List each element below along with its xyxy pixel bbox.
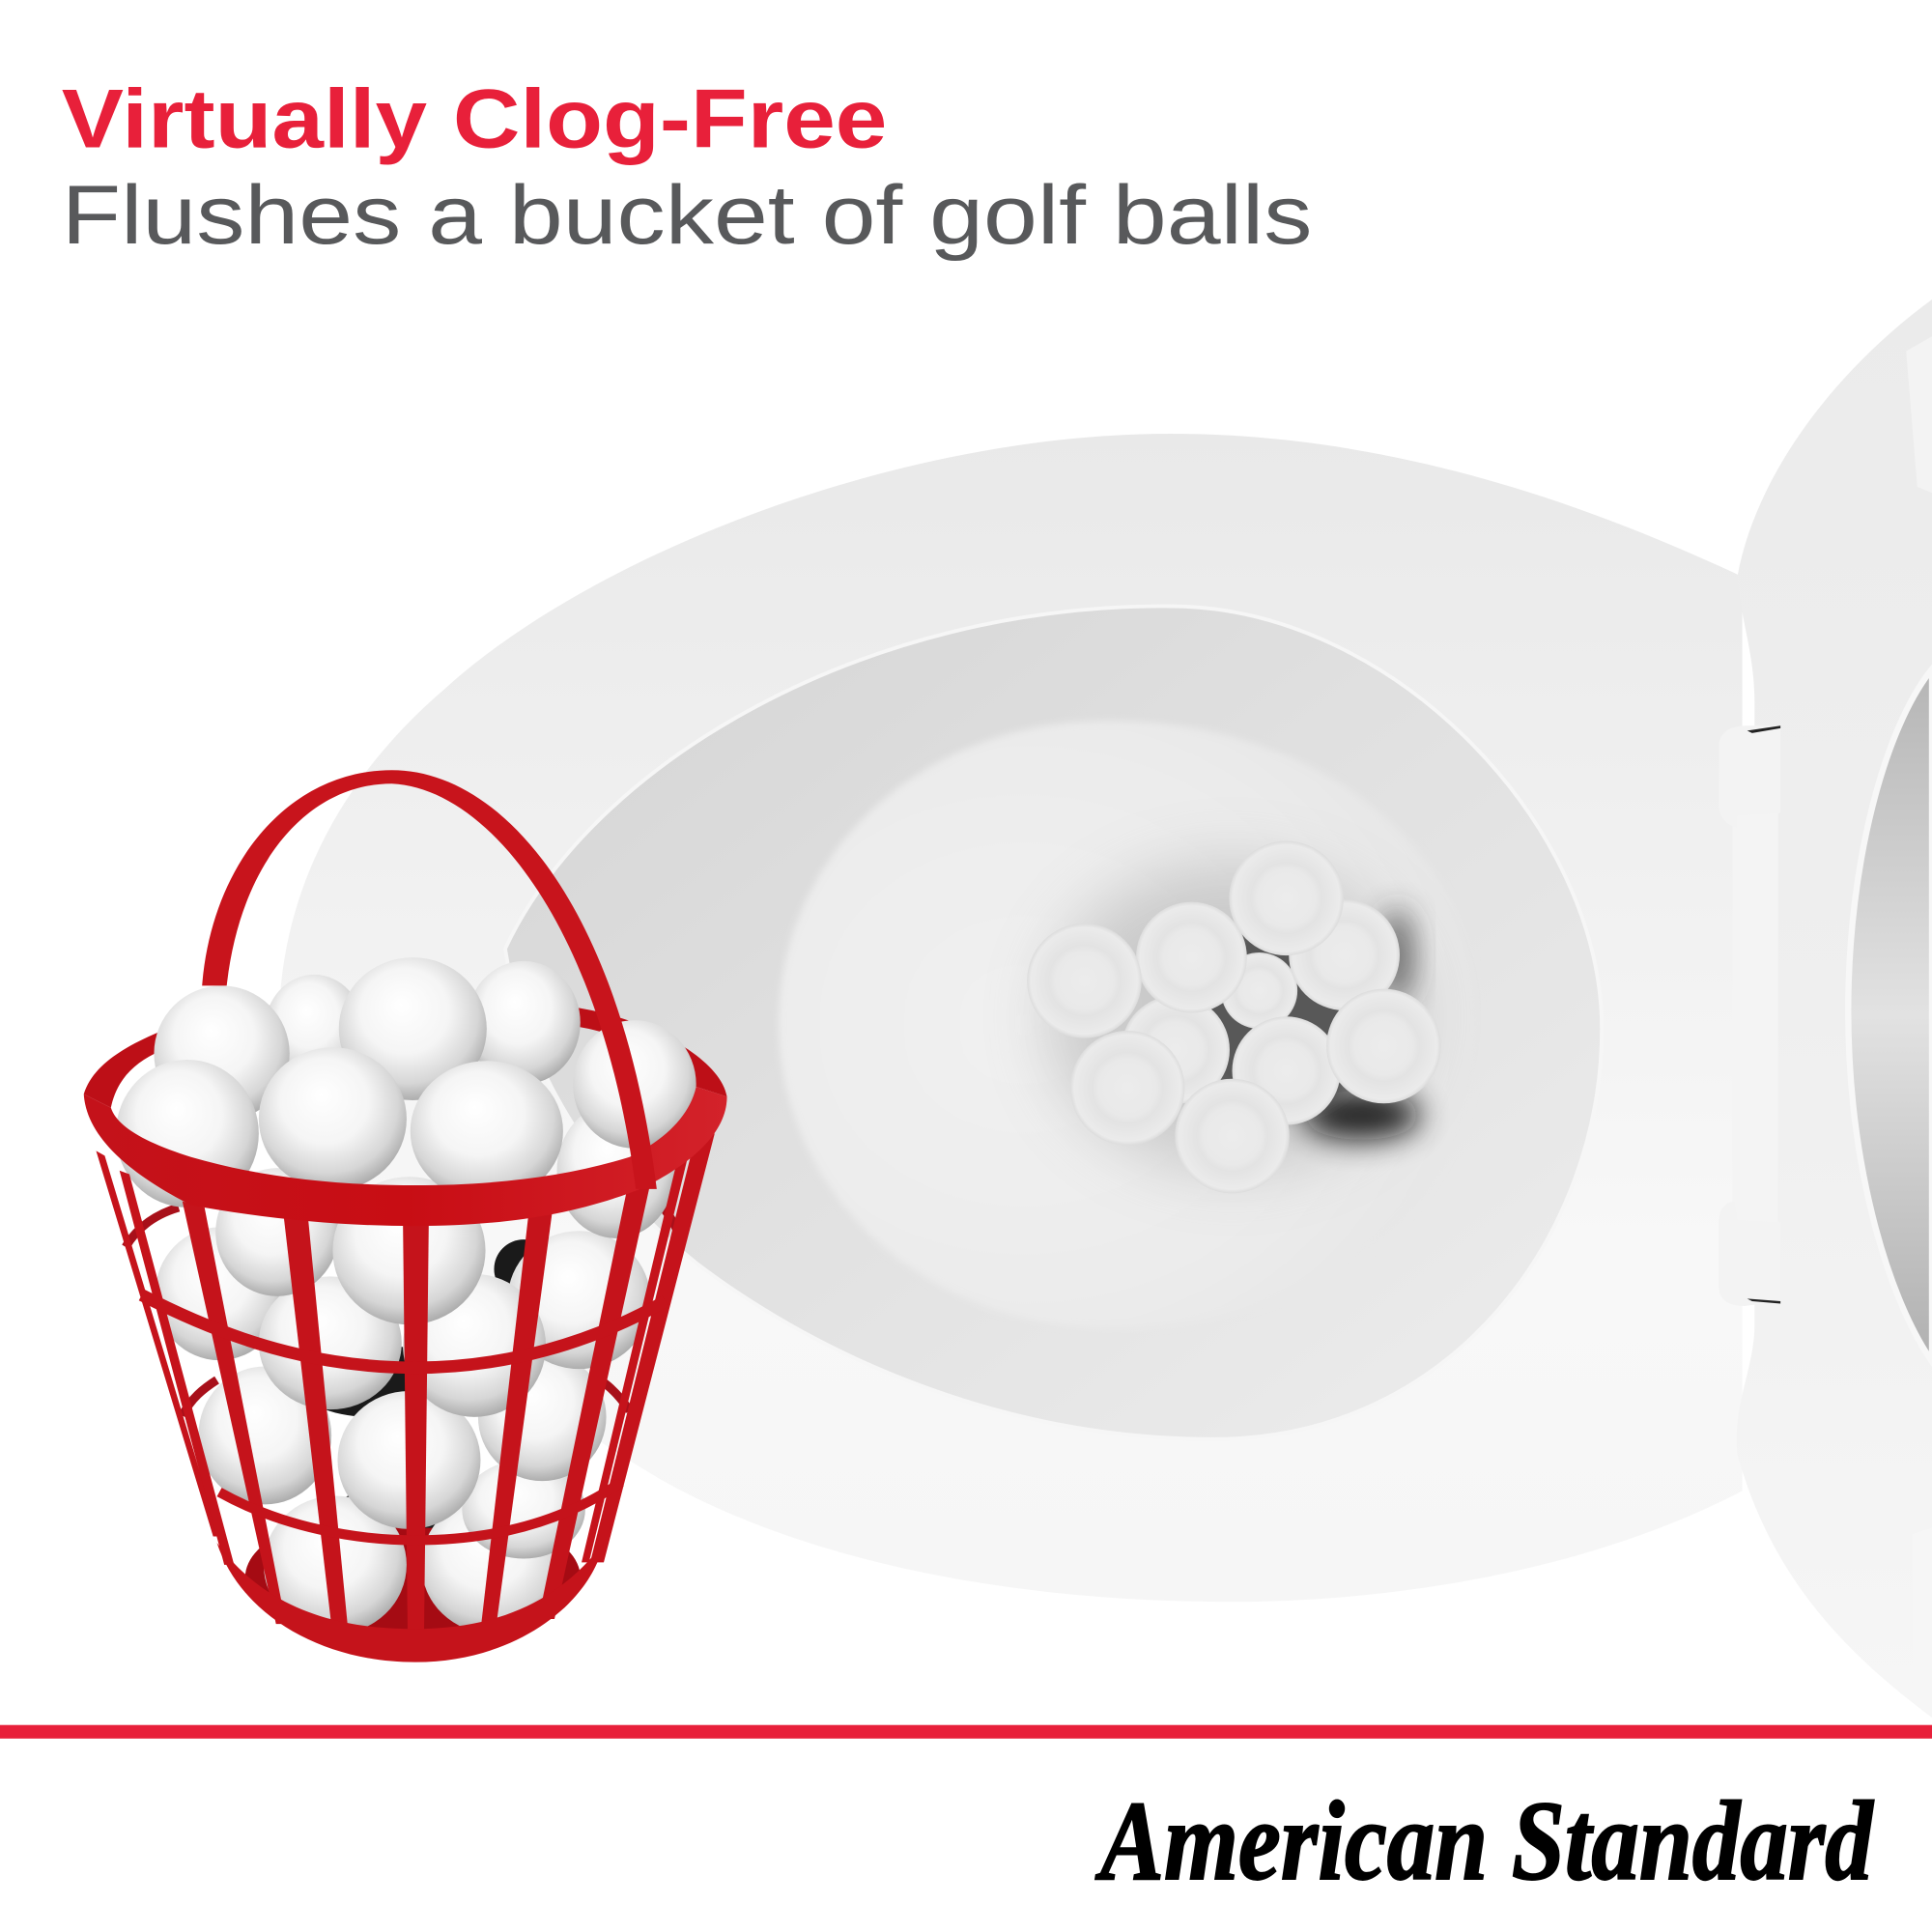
- top bumper: [1906, 336, 1932, 493]
- bottom bumper: [1913, 1528, 1932, 1694]
- toilet bowl: [281, 434, 1743, 1602]
- golf balls in basket: [116, 957, 696, 1634]
- basket hoops: [142, 1295, 666, 1540]
- basket handle: [202, 770, 657, 1189]
- seat body: [1737, 299, 1932, 1718]
- bowl interior: [505, 607, 1602, 1439]
- water surface: [779, 721, 1479, 1328]
- bowl rim: [281, 434, 1743, 1602]
- title: Virtually Clog-Free: [62, 71, 887, 165]
- basket inner rings: [126, 1199, 679, 1416]
- lower hinge strap: [1719, 1202, 1780, 1306]
- basket base band: [216, 1543, 604, 1662]
- toilet seat: [1719, 299, 1932, 1718]
- upper hinge strap: [1719, 725, 1780, 828]
- basket of golf balls: [84, 770, 727, 1662]
- dark gaps between balls: [296, 1239, 554, 1528]
- basket floor: [245, 1506, 581, 1649]
- basket front rim: [84, 1087, 727, 1226]
- seat opening: [1848, 669, 1932, 1361]
- divider line: [0, 1725, 1932, 1739]
- basket back rim: [84, 996, 727, 1108]
- hinge body: [1732, 813, 1778, 1226]
- drain shadow: [1047, 863, 1421, 1171]
- subtitle: Flushes a bucket of golf balls: [62, 168, 1312, 262]
- basket front bars: [96, 1133, 715, 1651]
- golf balls in bowl: [1027, 841, 1441, 1193]
